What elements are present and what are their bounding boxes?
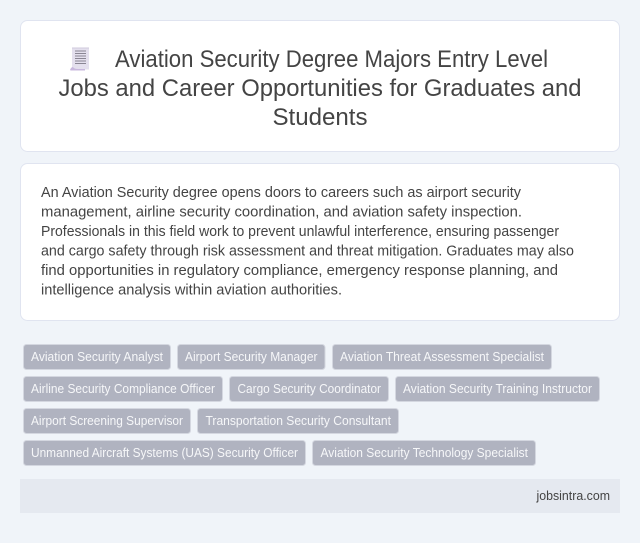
- panel: title card: [20, 20, 620, 152]
- tag: Aviation Security Technology Specialist: [312, 440, 536, 466]
- panel: description card: [20, 164, 620, 320]
- tag: Aviation Security Analyst: [24, 344, 170, 370]
- description text: Professionals in this field work to prevent unlawful interference, ensuring passenger: [41, 224, 559, 240]
- footer: [20, 479, 620, 513]
- tag: Airline Security Compliance Officer: [24, 376, 222, 402]
- tag: Airport Screening Supervisor: Airport Screening Supervisor: [31, 414, 183, 428]
- tag: Airport Security Manager: [178, 344, 325, 370]
- tag: Transportation Security Consultant: [198, 408, 398, 434]
- description text: find opportunities in regulatory compliance, emergency response planning, and: [41, 263, 558, 279]
- tag: Aviation Security Technology Specialist: Aviation Security Technology Specialist: [320, 446, 529, 460]
- job tags: [24, 344, 600, 466]
- tag: Aviation Security Analyst: Aviation Security Analyst: [31, 350, 163, 364]
- description text: and cargo safety through risk assessment and threat mitigation. Graduates may also: [41, 244, 574, 260]
- tag: Cargo Security Coordinator: Cargo Security Coordinator: [238, 382, 381, 396]
- description text: [41, 185, 574, 298]
- description text: An Aviation Security degree opens doors to careers such as airport security: [41, 185, 522, 201]
- tag: Transportation Security Consultant: Transportation Security Consultant: [206, 414, 392, 428]
- tag: Aviation Threat Assessment Specialist: Aviation Threat Assessment Specialist: [340, 350, 545, 364]
- title: Students: [272, 104, 368, 131]
- tag: Unmanned Aircraft Systems (UAS) Security Officer: Unmanned Aircraft Systems (UAS) Security Officer: [31, 446, 298, 460]
- footer source text: jobsintra.com: [536, 489, 610, 503]
- title: Aviation Security Degree Majors Entry Level: [115, 46, 548, 73]
- icon: document scroll: [70, 48, 89, 70]
- description text: management, airline security coordination, and aviation safety inspection.: [41, 204, 522, 220]
- tag: Aviation Security Training Instructor: Aviation Security Training Instructor: [403, 382, 592, 396]
- title: [58, 46, 582, 131]
- title: Jobs and Career Opportunities for Graduates and: [58, 75, 582, 102]
- tag: Airport Security Manager: Airport Security Manager: [185, 350, 318, 364]
- tag: Aviation Threat Assessment Specialist: [332, 344, 552, 370]
- tag: Aviation Security Training Instructor: [396, 376, 600, 402]
- tag: Cargo Security Coordinator: [230, 376, 388, 402]
- tag: Unmanned Aircraft Systems (UAS) Security Officer: [24, 440, 306, 466]
- tag: Airport Screening Supervisor: [24, 408, 190, 434]
- description text: intelligence analysis within aviation authorities.: [41, 282, 342, 298]
- tag: Airline Security Compliance Officer: Airline Security Compliance Officer: [31, 382, 215, 396]
